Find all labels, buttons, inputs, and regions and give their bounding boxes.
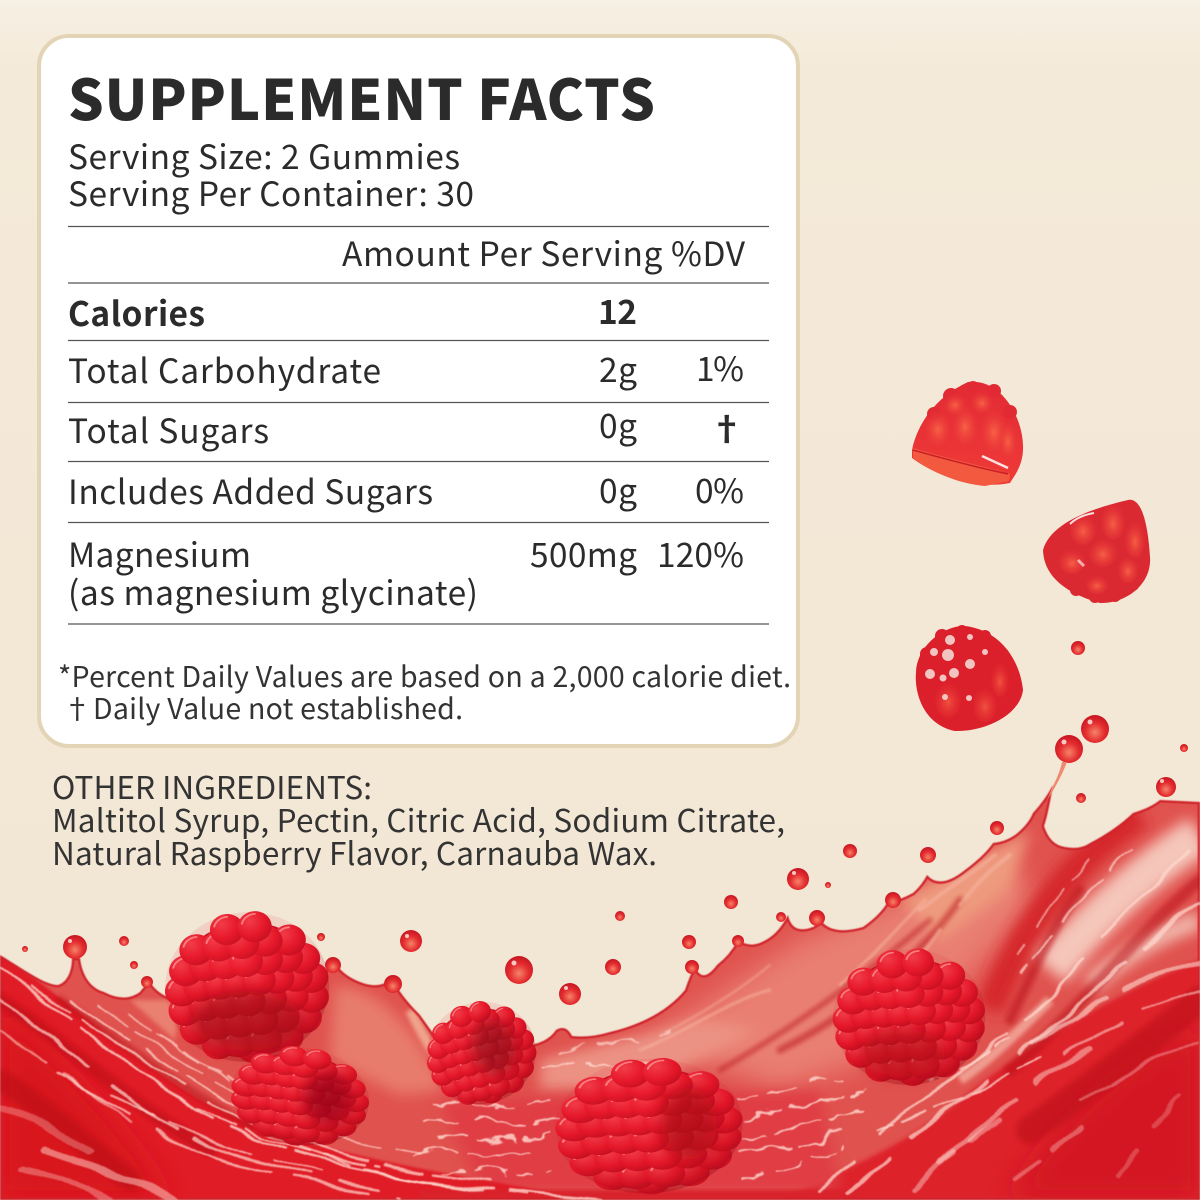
droplet tail <box>1047 762 1067 800</box>
ripple lines: centre pool <box>410 1034 875 1176</box>
footnotes: *Percent Daily Values are based on a 2,000 calorie diet. <box>58 655 791 696</box>
row: calories <box>68 285 637 336</box>
raspberries <box>157 904 990 1199</box>
text block: other ingredients: OTHER INGREDIENTS: <box>52 763 372 809</box>
raspberry: upper left <box>157 904 337 1071</box>
row: magnesium: Magnesium <box>68 528 251 577</box>
footnotes: † <box>63 687 92 728</box>
darker current lines <box>0 880 1200 1180</box>
row: total sugars: Total Sugars <box>68 404 269 453</box>
icon: gummy round <box>916 625 1023 731</box>
row: total carbohydrate: Total Carbohydrate <box>68 344 381 393</box>
text block: other ingredients <box>52 763 785 875</box>
row: total sugars: † <box>710 402 744 451</box>
juice droplets <box>22 641 1188 1005</box>
raspberry: lower left <box>224 1038 376 1155</box>
row: calories: 12 <box>598 285 637 334</box>
row: total carbohydrate: 2g <box>599 343 637 392</box>
heading: supplement facts: SUPPLEMENT FACTS <box>68 56 655 137</box>
icon: gummy tilted <box>1043 500 1150 603</box>
droplet highlights <box>68 720 1164 990</box>
raspberry: back middle <box>415 990 548 1117</box>
text block: other ingredients: Natural Raspberry Flavor, Carnauba Wax. <box>52 829 657 875</box>
colour fields <box>0 815 1200 1200</box>
row: total carbohydrate: 1% <box>696 342 744 391</box>
row: magnesium: 500mg <box>530 528 637 577</box>
panel: supplement facts <box>39 36 798 746</box>
raspberry: bottom centre <box>552 1054 746 1199</box>
text block: other ingredients: Maltitol Syrup, Pectin, Citric Acid, Sodium Citrate, <box>52 796 785 842</box>
pale current lines: right wave <box>820 850 1200 1200</box>
text block: serving info: Serving Size: 2 Gummies <box>68 130 460 179</box>
text block: serving info: Serving Per Container: 30 <box>68 167 474 216</box>
row: includes added sugars: 0% <box>695 464 744 513</box>
pale current lines: left wave <box>0 968 600 1200</box>
footnotes <box>58 655 791 728</box>
row: calories: Calories <box>68 287 205 336</box>
salmon wave streaks <box>640 855 1010 1050</box>
row: magnesium: (as magnesium glycinate) <box>68 566 478 615</box>
footnotes: Daily Value not established. <box>93 687 463 728</box>
raspberry: right <box>828 944 990 1091</box>
row: includes added sugars: Includes Added Sugars <box>68 465 433 514</box>
table header: Amount Per Serving %DV <box>342 227 746 276</box>
juice splash <box>0 780 1200 1200</box>
row: total sugars: 0g <box>599 399 637 448</box>
rim of the splash edge <box>0 785 1200 1200</box>
row: magnesium <box>68 528 744 615</box>
row: includes added sugars: 0g <box>599 464 637 513</box>
row: includes added sugars <box>68 464 744 514</box>
row: total carbohydrate <box>68 342 744 393</box>
row: total sugars <box>68 399 744 453</box>
text block: serving info <box>68 130 474 216</box>
row: magnesium: 120% <box>657 528 744 577</box>
icon: gummy halved <box>912 381 1023 486</box>
